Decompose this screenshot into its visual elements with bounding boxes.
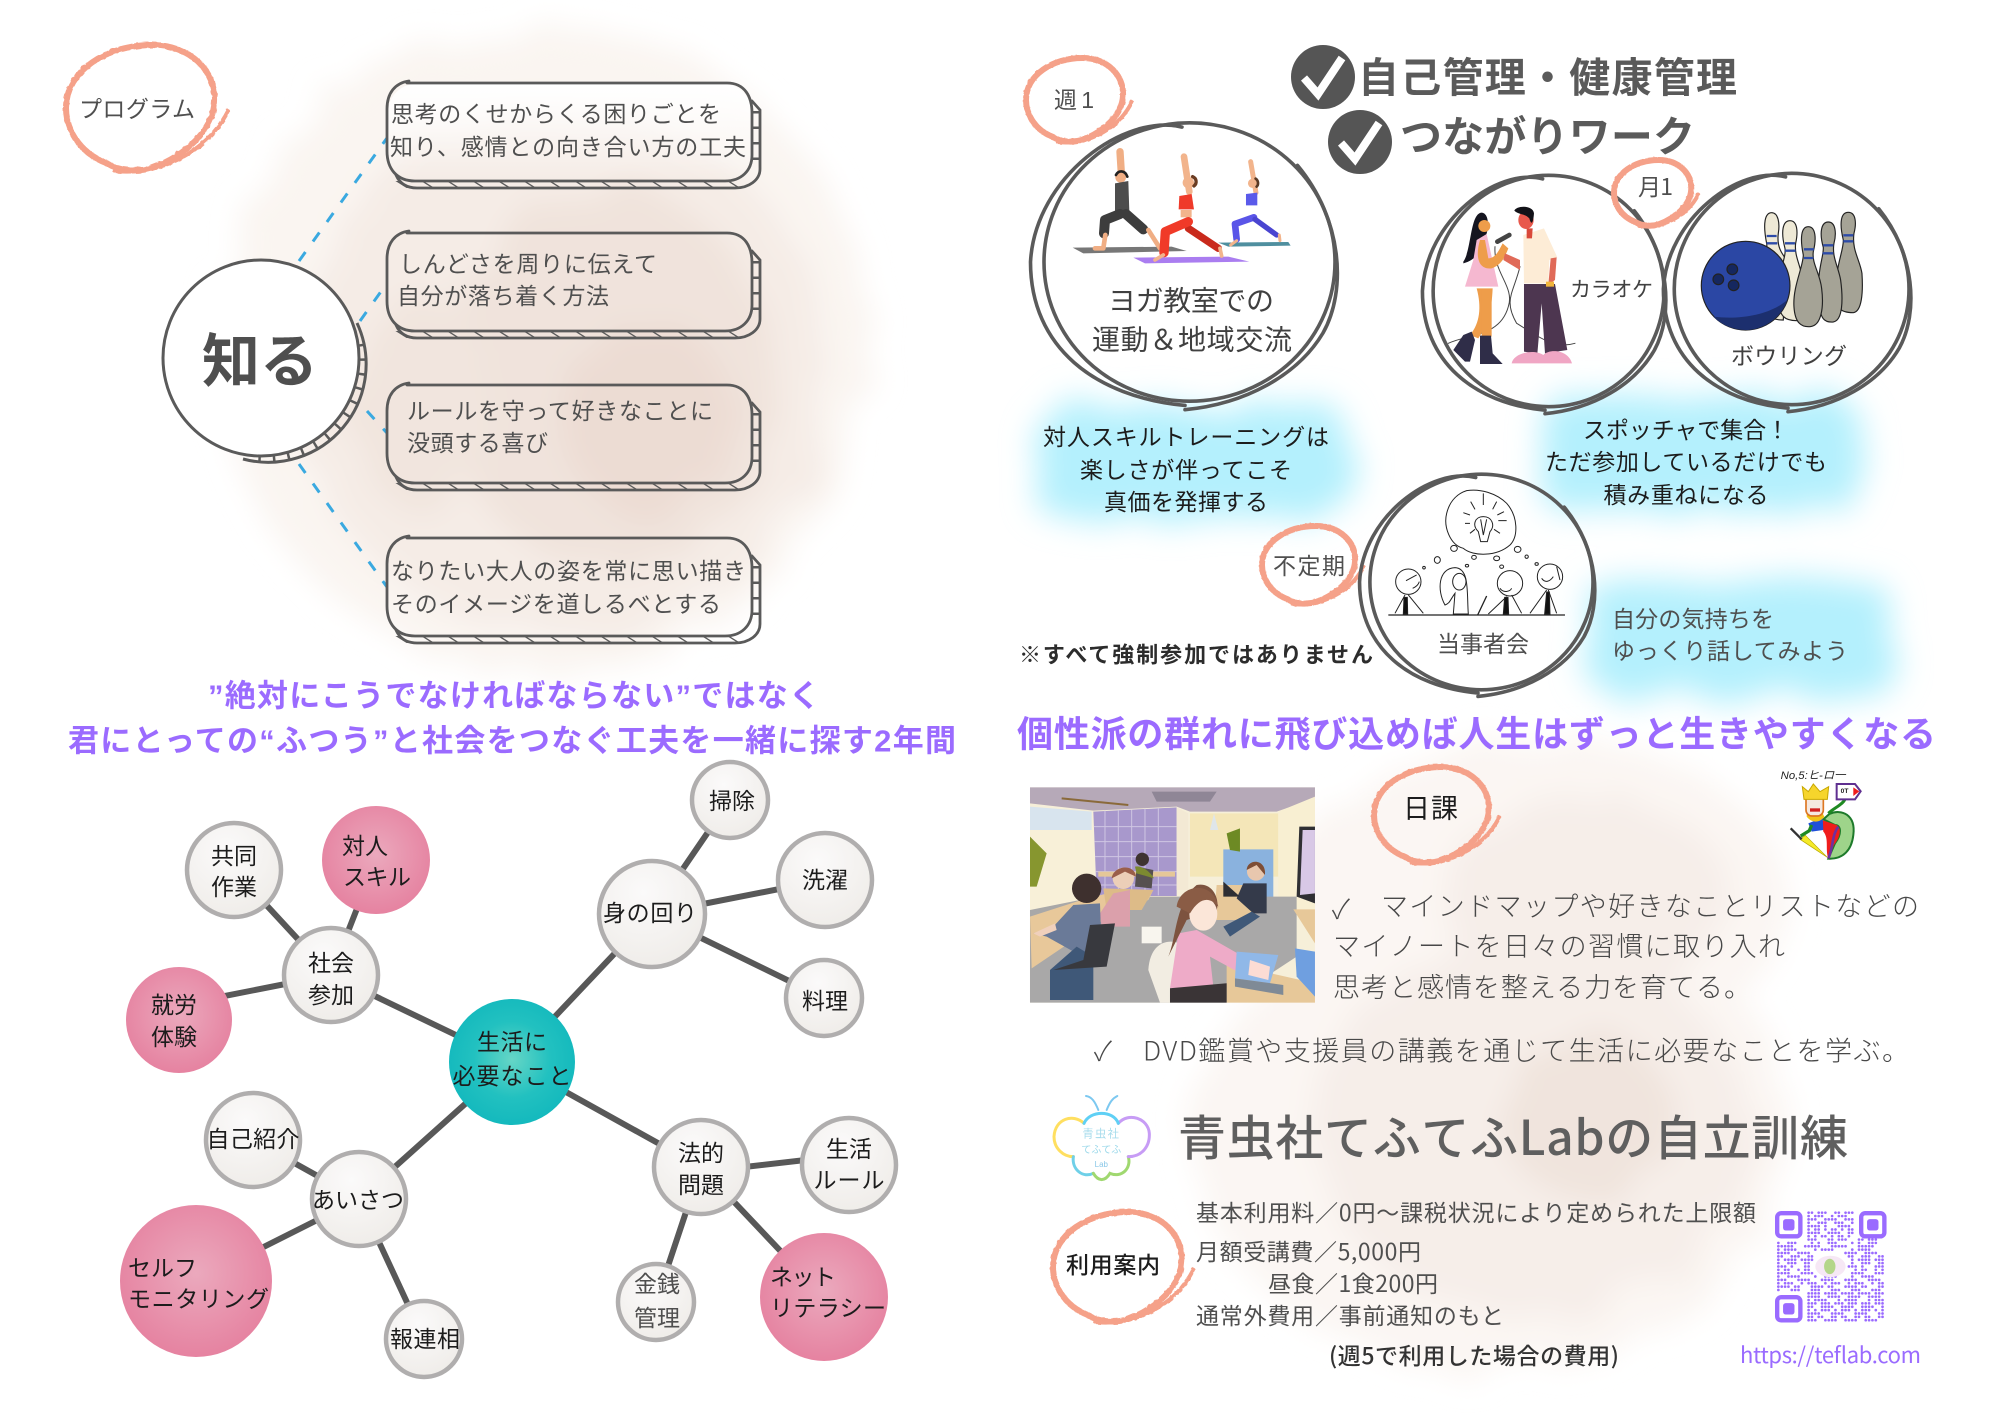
QR code <box>1777 1213 1886 1320</box>
check item: DVD lectures: DVD鑑賞や支援員の講義を通じて生活に必要なことを学ぶ。 <box>1143 1030 1909 1068</box>
title: connection work <box>1328 110 1695 174</box>
heading: left purple message: 君にとっての“ふつう”と社会をつなぐ工夫を一緒に探す2年間 <box>68 724 956 758</box>
title: self and health management <box>1291 45 1737 109</box>
main circle: know <box>163 260 366 462</box>
badge: usage info <box>1053 1212 1193 1323</box>
node: money management: 管理 <box>634 1305 680 1331</box>
callout: social skills <box>1043 424 1329 515</box>
node: legal matters: 法的 <box>678 1140 724 1166</box>
check item: mind map: 思考と感情を整える力を育てる。 <box>1333 973 1751 1003</box>
callout: sports: 積み重ねになる <box>1604 482 1768 508</box>
logo: butterfly: Lab <box>1095 1160 1109 1169</box>
node: money management: 金銭 <box>634 1271 680 1297</box>
mind map <box>120 762 896 1377</box>
fee list: 昼食／1食200円 <box>1268 1265 1438 1299</box>
card 3 <box>387 383 760 490</box>
mascot: hero character: No,5:ヒ-ロ一 <box>1781 770 1847 782</box>
badge: weekly <box>1026 58 1132 142</box>
node: interpersonal skills: スキル <box>343 864 411 890</box>
title: self and health management: 自己管理・健康管理 <box>1358 55 1737 101</box>
card 2 <box>387 231 760 338</box>
badge: irregular <box>1262 526 1364 604</box>
card 3: ルールを守って好きなことに <box>407 398 713 424</box>
circle: peer meeting: 当事者会 <box>1437 631 1529 657</box>
cyan wash: yoga caption <box>1035 395 1893 696</box>
card 1: 思考のくせからくる困りごとを <box>391 101 721 127</box>
circle: yoga <box>1030 123 1337 410</box>
circle: bowling: ボウリング <box>1731 343 1847 369</box>
node: cleaning: 掃除 <box>709 788 755 814</box>
card 2: 自分が落ち着く方法 <box>397 283 609 309</box>
photo: classroom illustration <box>1030 787 1315 1003</box>
node: life rules <box>802 1118 896 1212</box>
node: cooking <box>786 960 862 1036</box>
circle: bowling <box>1663 173 1911 412</box>
node: reporting: 報連相 <box>390 1326 460 1352</box>
note: not mandatory: ※すべて強制参加ではありません <box>1019 642 1373 668</box>
card 4 <box>387 536 760 643</box>
logo: butterfly: 青虫社 <box>1082 1126 1120 1140</box>
check item: mind map: マインドマップや好きなことリストなどの <box>1381 892 1919 922</box>
node: self introduction: 自己紹介 <box>206 1126 300 1152</box>
node: social participation: 参加 <box>308 982 354 1008</box>
node: net literacy: ネット <box>770 1264 836 1290</box>
card 4: なりたい大人の姿を常に思い描き <box>391 558 746 584</box>
card 4: そのイメージを道しるべとする <box>391 591 721 617</box>
node: self monitoring <box>120 1205 272 1357</box>
node: social participation <box>284 928 378 1022</box>
node: joint work <box>187 823 281 917</box>
node: legal matters <box>654 1120 748 1214</box>
mind map links <box>179 800 849 1339</box>
background wash: right <box>1190 740 1790 1370</box>
node: interpersonal skills: 対人 <box>342 833 388 859</box>
node: work experience <box>126 967 232 1073</box>
check item: DVD lectures: ✓ <box>1093 1030 1112 1068</box>
node: life rules: ルール <box>814 1167 884 1193</box>
heading: right purple message: 個性派の群れに飛び込めば人生はずっと生きやすくなる <box>1017 714 1936 754</box>
badge: monthly <box>1614 160 1698 226</box>
node: interpersonal skills <box>322 806 430 914</box>
node: net literacy <box>760 1233 888 1361</box>
node: joint work: 作業 <box>211 874 257 900</box>
node: reporting <box>386 1301 462 1377</box>
badge: usage info: 利用案内 <box>1066 1252 1160 1278</box>
title: program name: 青虫社てふてふLabの自立訓練 <box>1178 1099 1848 1169</box>
node: cooking: 料理 <box>802 988 848 1014</box>
badge: daily routine <box>1374 767 1499 864</box>
node: cleaning <box>692 762 768 838</box>
node: joint work: 共同 <box>211 843 257 869</box>
fee list: 月額受講費／5,000円 <box>1196 1233 1421 1267</box>
node: self monitoring: モニタリング <box>128 1286 269 1312</box>
node: self introduction <box>206 1093 300 1187</box>
illustration: people sharing an idea <box>1388 490 1565 615</box>
node: center: 生活に <box>477 1029 547 1055</box>
node: social participation: 社会 <box>308 950 354 976</box>
card 1 <box>387 81 760 188</box>
circle: yoga: 運動＆地域交流 <box>1092 324 1292 356</box>
mascot: hero character <box>1781 770 1861 859</box>
node: greeting: あいさつ <box>312 1187 404 1213</box>
node: work experience: 体験 <box>151 1024 197 1050</box>
node: life rules: 生活 <box>826 1136 872 1162</box>
node: self monitoring: セルフ <box>128 1255 197 1281</box>
heading: left purple message: ”絶対にこうでなければならない”ではなく <box>208 678 820 714</box>
badge: daily routine: 日課 <box>1403 794 1458 824</box>
node: daily life: 身の回り <box>603 900 697 926</box>
callout: sports <box>1545 417 1827 508</box>
badge: weekly: 週 1 <box>1054 87 1094 113</box>
callout: talk about feelings: ゆっくり話してみよう <box>1612 638 1848 664</box>
node: laundry: 洗濯 <box>802 867 848 893</box>
circle: peer meeting <box>1360 474 1595 696</box>
node: money management <box>618 1264 694 1340</box>
connector lines <box>299 138 387 587</box>
program badge <box>66 45 228 172</box>
check item: mind map: マイノートを日々の習慣に取り入れ <box>1333 932 1785 962</box>
circle: karaoke: カラオケ <box>1570 278 1653 302</box>
fee list <box>1196 1194 1756 1371</box>
card 3: 没頭する喜び <box>407 430 548 456</box>
illustration: yoga poses <box>1073 152 1291 263</box>
title: connection work: つながりワーク <box>1400 114 1695 160</box>
circle: yoga: ヨガ教室での <box>1108 286 1274 316</box>
callout: sports: スポッチャで集合！ <box>1583 417 1789 443</box>
node: center: 必要なこと <box>452 1063 572 1089</box>
callout: talk about feelings <box>1612 606 1848 664</box>
node: daily life <box>599 861 705 967</box>
mascot: hero character: 0T <box>1841 788 1848 795</box>
illustration: karaoke duet <box>1448 207 1575 364</box>
badge: irregular: 不定期 <box>1273 553 1345 579</box>
badge: monthly: 月1 <box>1638 168 1673 202</box>
callout: social skills: 楽しさが伴ってこそ <box>1080 457 1292 483</box>
main circle: know: 知る <box>202 330 318 394</box>
node: center <box>449 999 575 1125</box>
node: greeting <box>312 1152 406 1246</box>
node: legal matters: 問題 <box>678 1172 724 1198</box>
check item: mind map: ✓ <box>1331 888 1350 926</box>
callout: social skills: 対人スキルトレーニングは <box>1043 424 1329 450</box>
logo: butterfly: てふてふ <box>1081 1144 1121 1156</box>
node: net literacy: リテラシー <box>770 1295 886 1321</box>
fee list: 基本利用料／0円～課税状況により定められた上限額 <box>1196 1194 1756 1228</box>
logo: butterfly <box>1054 1096 1149 1180</box>
heading: left purple message <box>68 678 956 758</box>
card 2: しんどさを周りに伝えて <box>399 251 657 277</box>
node: laundry <box>778 833 872 927</box>
link: website: https://teflab.com <box>1740 1338 1921 1370</box>
card 1: 知り、感情との向き合い方の工夫 <box>390 134 746 160</box>
program badge: プログラム <box>79 96 195 122</box>
check item: mind map <box>1331 888 1919 1003</box>
fee list: (週5で利用した場合の費用) <box>1329 1337 1619 1371</box>
node: work experience: 就労 <box>151 992 197 1018</box>
circle: karaoke <box>1422 175 1666 414</box>
callout: social skills: 真価を発揮する <box>1104 489 1268 515</box>
illustration: bowling ball and pins <box>1701 212 1862 330</box>
callout: sports: ただ参加しているだけでも <box>1545 449 1827 475</box>
callout: talk about feelings: 自分の気持ちを <box>1612 606 1774 632</box>
background wash: left <box>220 25 870 675</box>
fee list: 通常外費用／事前通知のもと <box>1196 1297 1504 1331</box>
